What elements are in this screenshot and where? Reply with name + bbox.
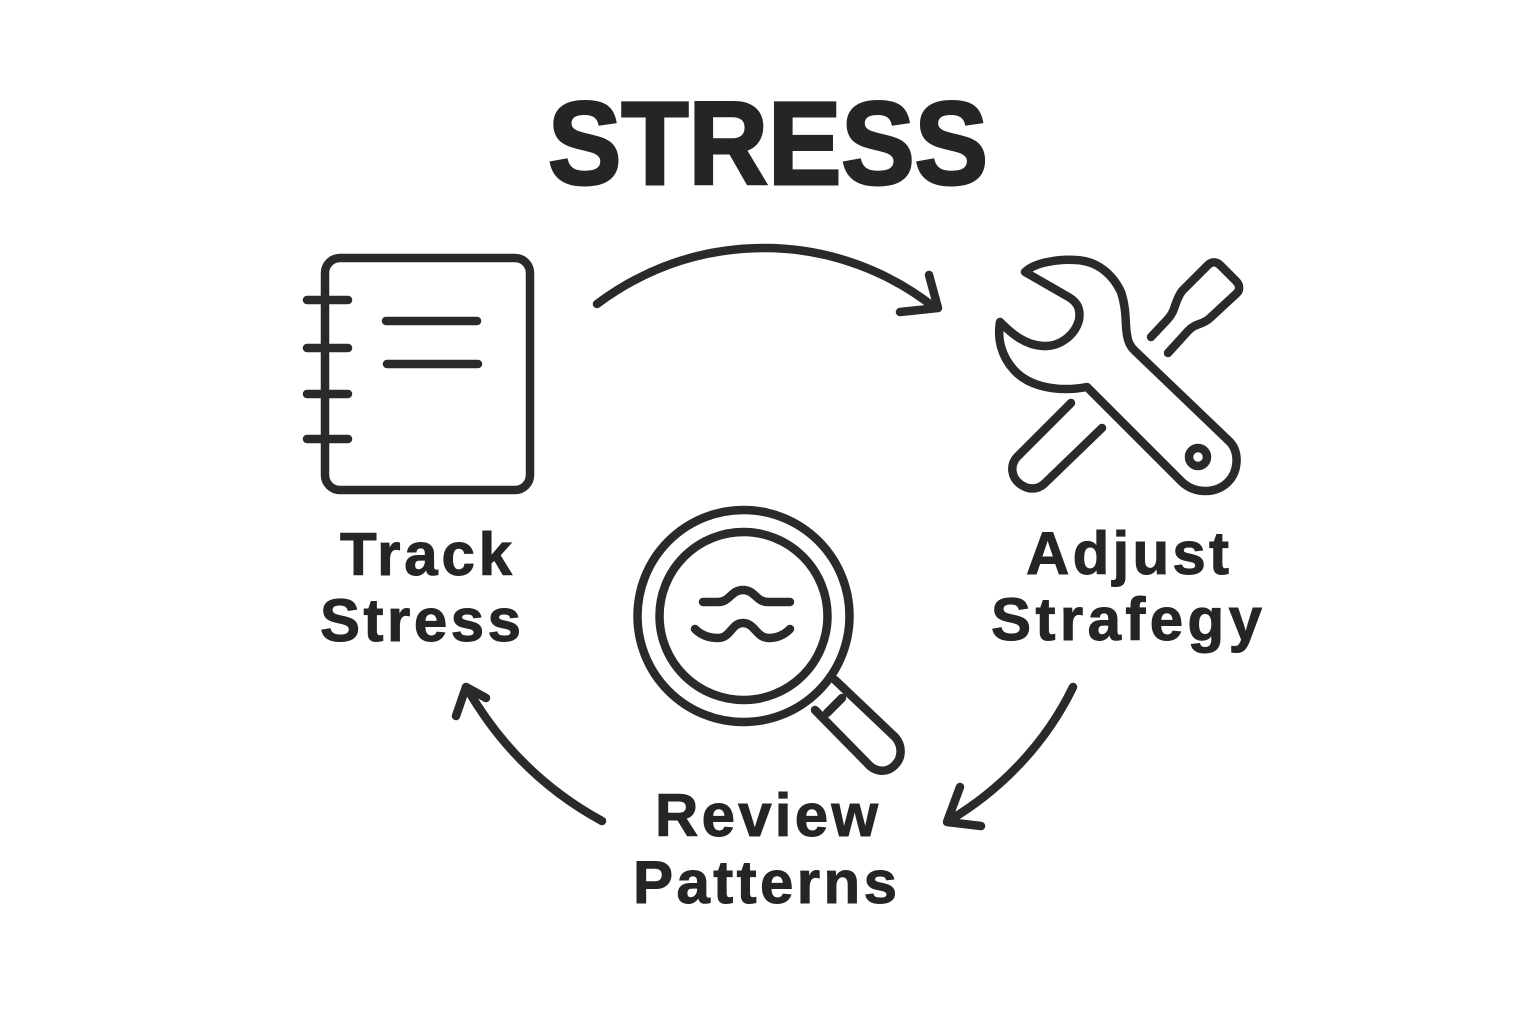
label: review patterns: Review: [655, 782, 878, 849]
label: adjust strategy: Adjust: [1026, 520, 1229, 587]
label: adjust strategy: [991, 520, 1263, 653]
arrow: track to adjust: [597, 248, 938, 312]
label: review patterns: [633, 782, 897, 916]
arrow: adjust to review: [947, 687, 1073, 826]
arrow: review to track: [456, 687, 602, 821]
title: STRESS: [548, 78, 988, 210]
label: track stress: [320, 521, 521, 654]
icon: magnifying glass: [638, 510, 901, 771]
icon: wrench and screwdriver: [999, 260, 1239, 491]
label: review patterns: Patterns: [633, 849, 897, 916]
label: adjust strategy: Strafegy: [991, 586, 1263, 653]
label: track stress: Stress: [320, 587, 521, 654]
icon: notebook: [307, 258, 530, 490]
label: track stress: Track: [340, 521, 513, 588]
